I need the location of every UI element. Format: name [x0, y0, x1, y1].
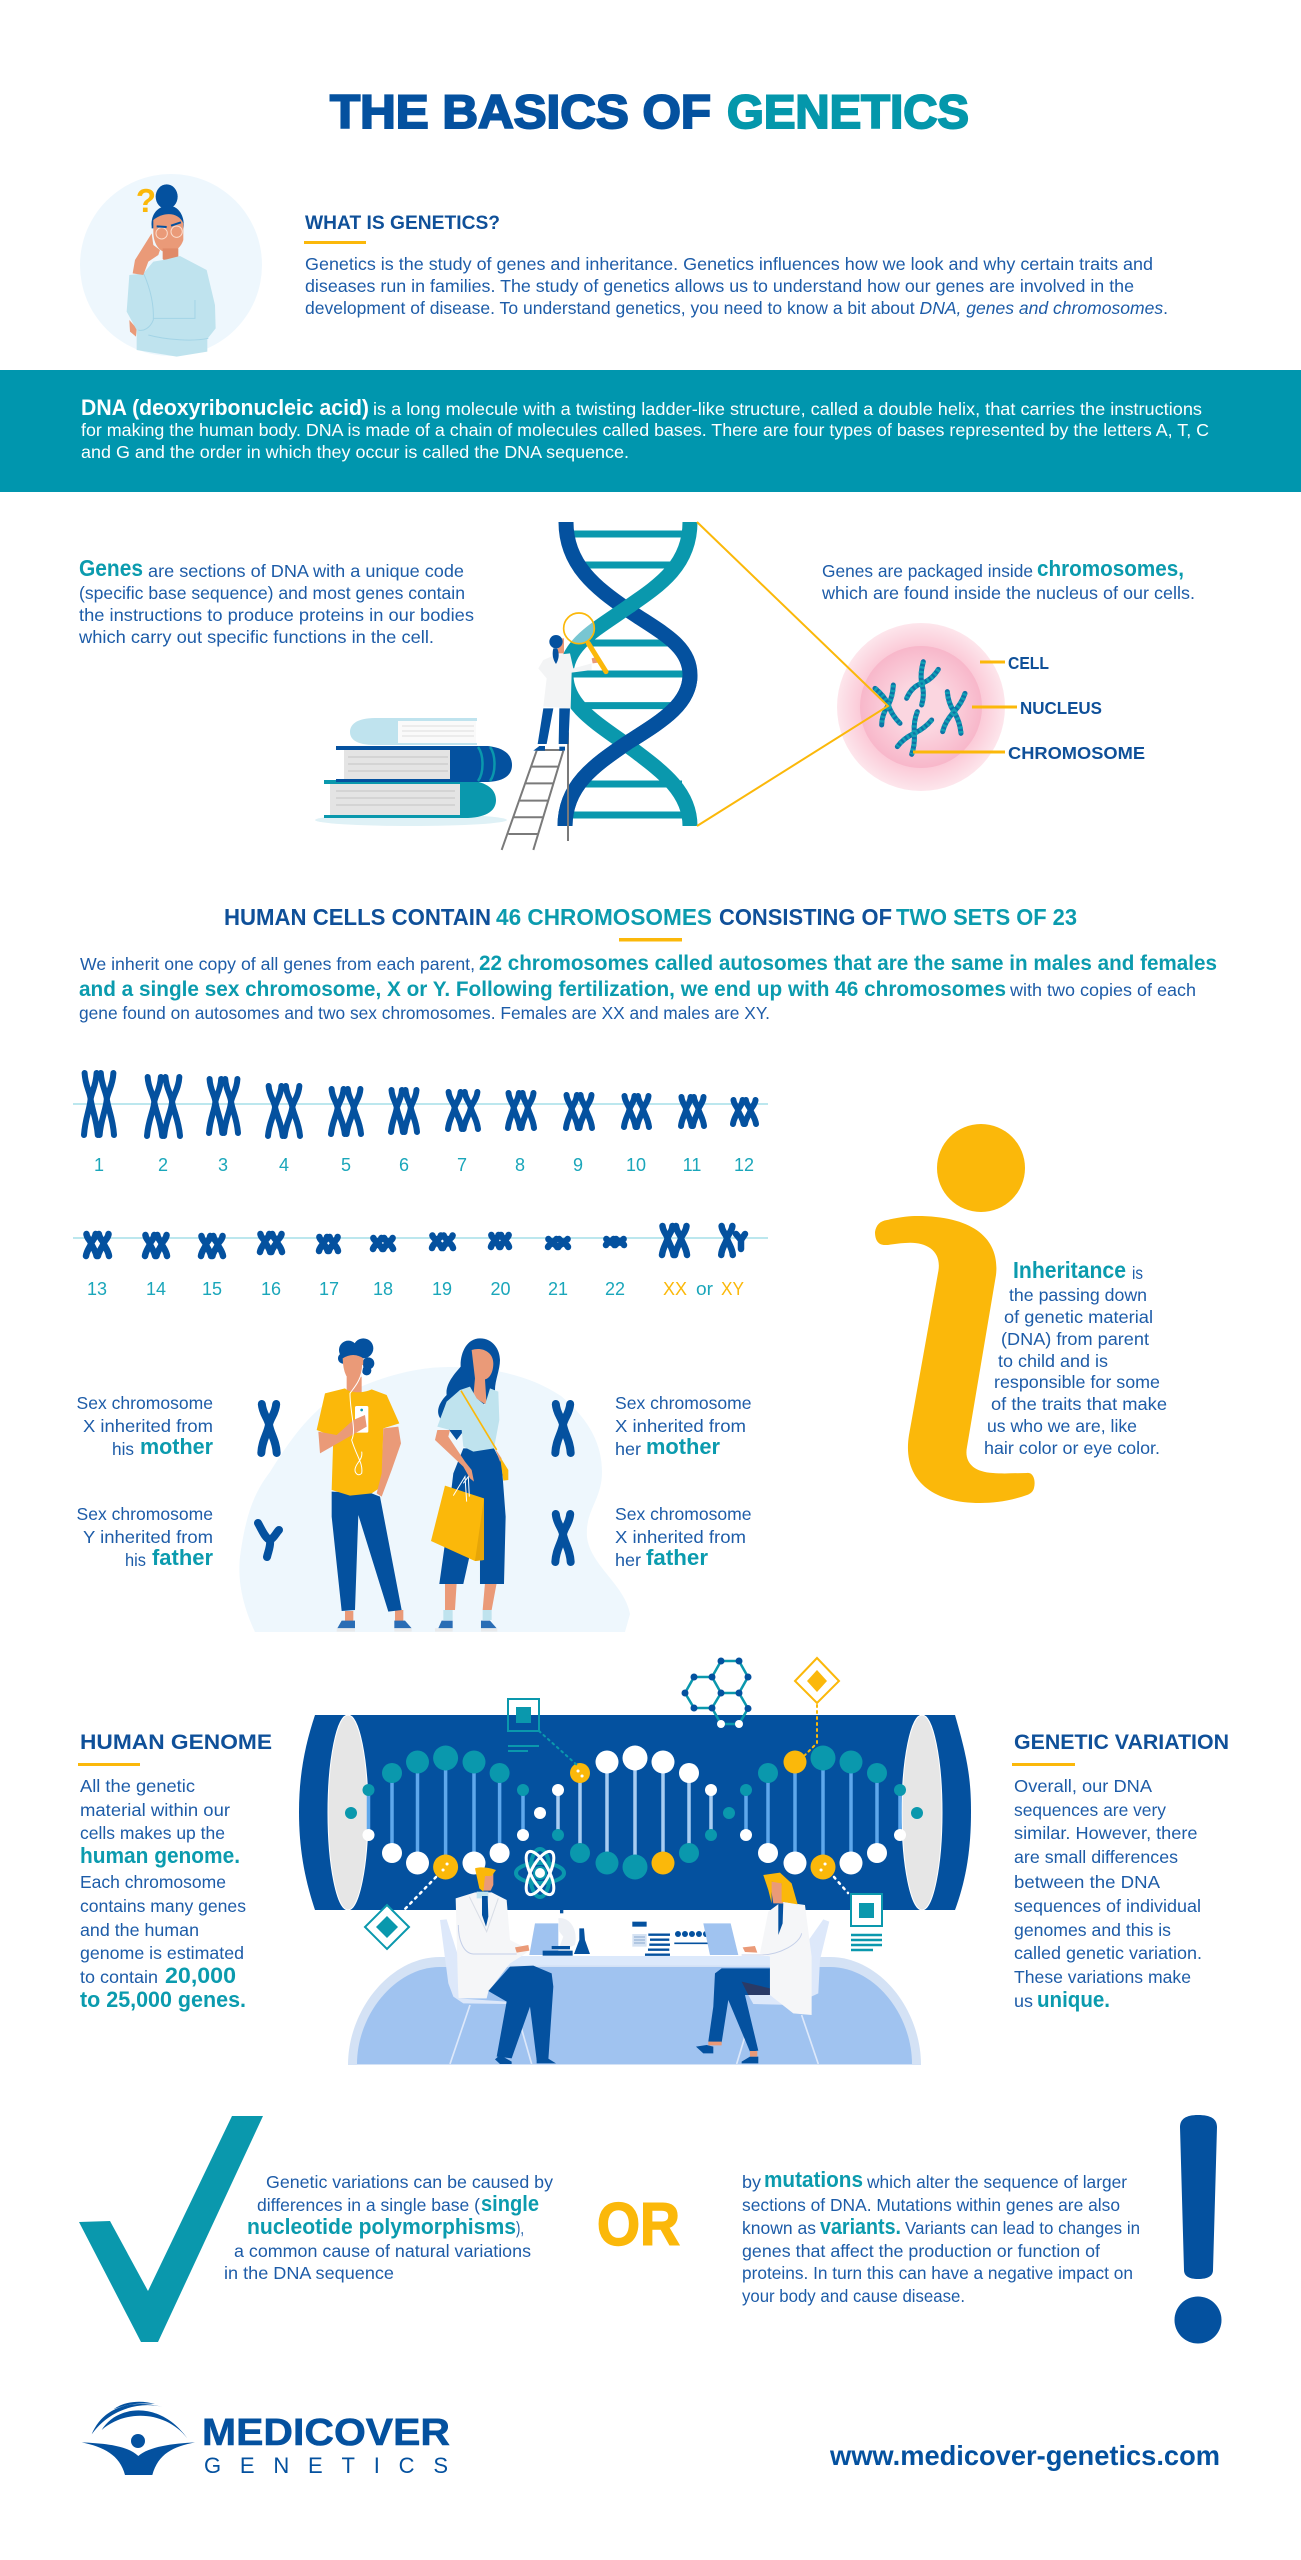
text block: mutations: your body and cause disease.	[742, 2286, 965, 2306]
heading: human cells: 46 CHROMOSOMES	[496, 904, 712, 930]
text block: mutations: sections of DNA. Mutations within genes are also	[742, 2195, 1120, 2215]
icon: molecule	[682, 1658, 752, 1728]
chart: karyotype row 2: 17	[319, 1279, 339, 1299]
icon: document right	[834, 1877, 882, 1950]
text block: her mother: Sex chromosome	[615, 1393, 752, 1413]
text block: single nucleotide polymorphisms	[224, 2172, 553, 2283]
cell labels: NUCLEUS	[1020, 698, 1102, 718]
logo: Medicover Genetics	[82, 2402, 450, 2478]
text block: genetics intro: development of disease. To understand genetics, you need to know a bit about DNA, genes and chromosomes.	[305, 298, 1168, 318]
text block: mutations: proteins. In turn this can have a negative impact on	[742, 2263, 1133, 2283]
chart: karyotype row 1: 2	[158, 1155, 168, 1175]
panel: DNA banner: for making the human body. DNA is made of a chain of molecules called bases. There are four types of bases represented by the letters A, T, C	[81, 420, 1209, 440]
text block: inheritance of chromosomes	[79, 952, 1217, 1023]
text block: genes: which carry out specific functions in the cell.	[78, 627, 434, 647]
text block: mutations: mutations	[764, 2167, 863, 2192]
chart: karyotype row 2: 22	[605, 1279, 625, 1299]
illustration: lab scene	[348, 1867, 921, 2065]
chart: karyotype row 1: 10	[626, 1155, 646, 1175]
title	[330, 85, 969, 138]
chart: karyotype row 2: 15	[202, 1279, 222, 1299]
chart: karyotype row 1: 11	[683, 1155, 701, 1175]
text block: genetic variation: These variations make	[1014, 1967, 1191, 1987]
text block: single nucleotide polymorphisms: single	[481, 2191, 539, 2216]
chart: karyotype row 2: 16	[261, 1279, 281, 1299]
text block: inheritance: hair color or eye color.	[984, 1438, 1160, 1458]
text block: inheritance of chromosomes: and a single sex chromosome, X or Y. Following fertilization, we end up with 46 chromosomes	[79, 978, 1006, 1001]
text block: inheritance	[984, 1257, 1167, 1458]
accent bar	[304, 241, 366, 244]
man	[317, 1338, 412, 1632]
text block: inheritance of chromosomes: gene found on autosomes and two sex chromosomes. Females are XX and males are XY.	[79, 1003, 770, 1023]
icon: chromosome X left	[261, 1404, 277, 1453]
text block: genes	[78, 555, 474, 647]
text block: her mother: mother	[646, 1434, 720, 1459]
heading: human cells: HUMAN CELLS CONTAIN	[224, 904, 491, 930]
chart: karyotype row 2: 21	[548, 1279, 568, 1299]
connector lines: DNA to cell	[697, 522, 888, 826]
heading: what is genetics: WHAT IS GENETICS?	[305, 213, 500, 234]
text block: inheritance: responsible for some	[994, 1372, 1160, 1392]
text block: single nucleotide polymorphisms: differences in a single base (	[257, 2195, 480, 2215]
icon: exclamation mark	[1174, 2115, 1222, 2344]
illustration: man and woman	[317, 1338, 508, 1632]
text block: human genome	[80, 1776, 246, 2012]
text block: single nucleotide polymorphisms: in the DNA sequence	[224, 2263, 394, 2283]
icon: teal diamond	[365, 1877, 436, 1949]
cell labels	[1008, 653, 1145, 763]
teal bases	[345, 1746, 923, 1880]
text block: genetic variation: between the DNA	[1014, 1872, 1160, 1892]
text block: his father: Y inherited from	[83, 1527, 213, 1547]
text block: human genome: genome is estimated	[80, 1943, 244, 1963]
heading: human genome: HUMAN GENOME	[80, 1731, 272, 1754]
text block: human genome: to contain	[80, 1967, 158, 1987]
text block: her father: X inherited from	[615, 1527, 746, 1547]
white bases	[362, 1746, 906, 1874]
text block: inheritance of chromosomes: 22 chromosomes called autosomes that are the same in males and females	[479, 952, 1217, 975]
text block: her father	[615, 1504, 752, 1570]
text block: his mother: his	[112, 1439, 134, 1459]
left chair	[440, 1919, 507, 2004]
icon: thinking woman	[80, 174, 262, 357]
OR label: OR	[597, 2191, 680, 2258]
heading: human cells: TWO SETS OF 23	[896, 904, 1077, 930]
text block: human genome: All the genetic	[80, 1776, 195, 1796]
icon: chromosome X right bottom	[555, 1514, 571, 1562]
text block: mutations: by	[742, 2172, 761, 2192]
panel: DNA banner	[0, 370, 1301, 492]
text block: her father: father	[646, 1545, 708, 1570]
accent bar	[619, 938, 682, 942]
icon: chromosome X right top	[555, 1404, 571, 1453]
text block: genetic variation: unique.	[1037, 1987, 1110, 2012]
chart: karyotype row 1: 5	[341, 1155, 351, 1175]
panel: DNA banner: and G and the order in which they occur is called the DNA sequence.	[81, 442, 629, 462]
text block: inheritance: (DNA) from parent	[1001, 1329, 1149, 1349]
text block: human genome: cells makes up the	[80, 1823, 225, 1843]
text block: her mother	[615, 1393, 752, 1459]
text block: inheritance: to child and is	[998, 1351, 1108, 1371]
text block: genes: Genes	[79, 555, 143, 581]
text block: inheritance: is	[1132, 1263, 1143, 1283]
panel: DNA banner: is a long molecule with a twisting ladder-like structure, called a double helix, that carries the instructions	[373, 399, 1202, 419]
text block: mutations: variants.	[820, 2214, 901, 2239]
icon: yellow diamond	[795, 1658, 839, 1755]
text block: single nucleotide polymorphisms: nucleotide polymorphisms	[247, 2214, 516, 2239]
text block: her father: her	[615, 1550, 641, 1570]
text block: his father: father	[152, 1545, 213, 1570]
text block: genetic variation: are small differences	[1014, 1847, 1178, 1867]
icon: letter i	[875, 1124, 1035, 1503]
cell labels: CELL	[1008, 653, 1049, 673]
text block: human genome: and the human	[80, 1920, 199, 1940]
text block: genetic variation: sequences of individual	[1014, 1896, 1201, 1916]
panel: DNA banner: DNA (deoxyribonucleic acid)	[81, 395, 369, 420]
chart: karyotype row 2: 18	[373, 1279, 393, 1299]
text block: human genome: material within our	[80, 1800, 230, 1820]
text block: genetics intro: Genetics is the study of genes and inheritance. Genetics influences how we look and why certain traits and	[305, 254, 1153, 274]
text block: mutations: Variants can lead to changes in	[905, 2218, 1140, 2238]
text block: single nucleotide polymorphisms: ),	[516, 2218, 524, 2238]
chart: karyotype row 1: 4	[279, 1155, 289, 1175]
text block: his father	[76, 1504, 213, 1570]
icon: document top left	[508, 1699, 577, 1765]
accent bar	[78, 1763, 140, 1766]
chart: karyotype row 2: 13	[87, 1279, 107, 1299]
title: THE BASICS OF	[330, 85, 711, 138]
title: GENETICS	[727, 85, 969, 138]
chart: karyotype row 1	[73, 1073, 768, 1175]
icon: chromosome Y	[258, 1523, 279, 1557]
text block: genetic variation: genomes and this is	[1014, 1920, 1171, 1940]
text block: chromosomes: chromosomes,	[1037, 556, 1184, 581]
heading: human cells	[224, 904, 1077, 930]
text block: mutations: known as	[742, 2218, 816, 2238]
chart: DNA double helix	[565, 522, 690, 826]
chart: karyotype row 2: XY	[721, 1279, 744, 1299]
logo: Medicover Genetics: MEDICOVER	[202, 2412, 450, 2454]
text block: genetics intro	[305, 254, 1168, 318]
text block: chromosomes	[821, 556, 1195, 603]
text block: genes: are sections of DNA with a unique code	[148, 561, 464, 581]
icon: scientist on ladder	[502, 613, 606, 850]
text block: her mother: X inherited from	[615, 1416, 746, 1436]
icon: cell with chromosomes	[837, 623, 1017, 791]
accent bar	[1012, 1763, 1075, 1766]
text block: human genome: Each chromosome	[80, 1872, 226, 1892]
text block: inheritance: us who we are, like	[987, 1416, 1137, 1436]
table	[485, 1956, 782, 1965]
heading: genetic variation: GENETIC VARIATION	[1014, 1731, 1229, 1754]
text block: inheritance: of the traits that make	[991, 1394, 1167, 1414]
background blob: people	[239, 1367, 630, 1632]
text block: his mother: X inherited from	[83, 1416, 213, 1436]
website url: www.medicover-genetics.com	[829, 2440, 1220, 2471]
icon: question mark: ?	[136, 182, 156, 219]
chart: karyotype row 2: XX	[663, 1279, 687, 1299]
text block: inheritance: the passing down	[1009, 1285, 1147, 1305]
text block: genetic variation: similar. However, there	[1014, 1823, 1198, 1843]
chart: karyotype row 1: 3	[218, 1155, 228, 1175]
chart: karyotype row 2: 19	[432, 1279, 452, 1299]
text block: his mother: mother	[140, 1434, 213, 1459]
chart: karyotype row 1: 9	[573, 1155, 583, 1175]
yellow bases	[433, 1750, 836, 1880]
text block: mutations	[742, 2167, 1140, 2306]
text block: his mother	[76, 1393, 213, 1459]
chart: karyotype row 2: 20	[490, 1279, 511, 1299]
illustration: DNA capsule	[299, 1715, 971, 1910]
text block: genetic variation: sequences are very	[1014, 1800, 1166, 1820]
text block: human genome: human genome.	[80, 1843, 240, 1868]
text block: genetic variation: called genetic variation.	[1014, 1943, 1202, 1963]
text block: single nucleotide polymorphisms: a common cause of natural variations	[234, 2241, 531, 2261]
magnifier	[564, 613, 594, 644]
text block: genes: (specific base sequence) and most genes contain	[79, 583, 465, 603]
chart: karyotype row 1: 7	[457, 1155, 467, 1175]
right scientist	[696, 1873, 812, 2063]
text block: single nucleotide polymorphisms: Genetic variations can be caused by	[266, 2172, 553, 2192]
items on table	[529, 1910, 738, 1956]
icon: check mark	[79, 2116, 263, 2342]
text block: genetic variation: Overall, our DNA	[1014, 1776, 1152, 1796]
text block: her mother: her	[615, 1439, 641, 1459]
text block: inheritance of chromosomes: with two copies of each	[1009, 980, 1196, 1000]
chart: karyotype row 1: 6	[399, 1155, 409, 1175]
text block: mutations: genes that affect the production or function of	[742, 2241, 1100, 2261]
logo: Medicover Genetics: GENETICS	[204, 2453, 448, 2478]
woman	[431, 1338, 508, 1632]
chart: karyotype row 1: 8	[515, 1155, 525, 1175]
text block: his father: his	[125, 1550, 146, 1570]
ladder	[502, 732, 568, 850]
icon: atom	[516, 1848, 564, 1898]
chart: karyotype row 2: 14	[146, 1279, 166, 1299]
text block: genetics intro: diseases run in families. The study of genetics allows us to understand how our genes are involved in the	[305, 276, 1134, 296]
text block: inheritance: of genetic material	[1004, 1307, 1153, 1327]
chart: karyotype row 2	[73, 1226, 768, 1299]
icon: stack of books	[315, 718, 512, 826]
text block: human genome: contains many genes	[80, 1896, 246, 1916]
left scientist	[456, 1867, 556, 2064]
text block: human genome: 20,000	[165, 1963, 236, 1988]
cell labels: CHROMOSOME	[1008, 743, 1145, 763]
text block: her father: Sex chromosome	[615, 1504, 752, 1524]
text block: mutations: which alter the sequence of larger	[866, 2172, 1127, 2192]
chart: karyotype row 1: 1	[94, 1155, 104, 1175]
text block: genes: the instructions to produce proteins in our bodies	[79, 605, 474, 625]
chart: karyotype row 2: or	[696, 1279, 713, 1299]
chart: karyotype row 1: 12	[734, 1155, 754, 1175]
text block: his father: Sex chromosome	[76, 1504, 213, 1524]
right chair	[748, 1919, 829, 2005]
text block: chromosomes: Genes are packaged inside	[822, 561, 1033, 581]
rods	[368, 1758, 900, 1867]
text block: genetic variation	[1014, 1776, 1202, 2012]
text block: human genome: to 25,000 genes.	[80, 1987, 246, 2012]
text block: genetic variation: us	[1014, 1991, 1033, 2011]
text block: inheritance of chromosomes: We inherit one copy of all genes from each parent,	[80, 954, 475, 974]
text block: chromosomes: which are found inside the nucleus of our cells.	[821, 583, 1195, 603]
text block: inheritance: Inheritance	[1013, 1257, 1126, 1283]
text block: his mother: Sex chromosome	[76, 1393, 213, 1413]
heading: human cells: CONSISTING OF	[719, 904, 892, 930]
